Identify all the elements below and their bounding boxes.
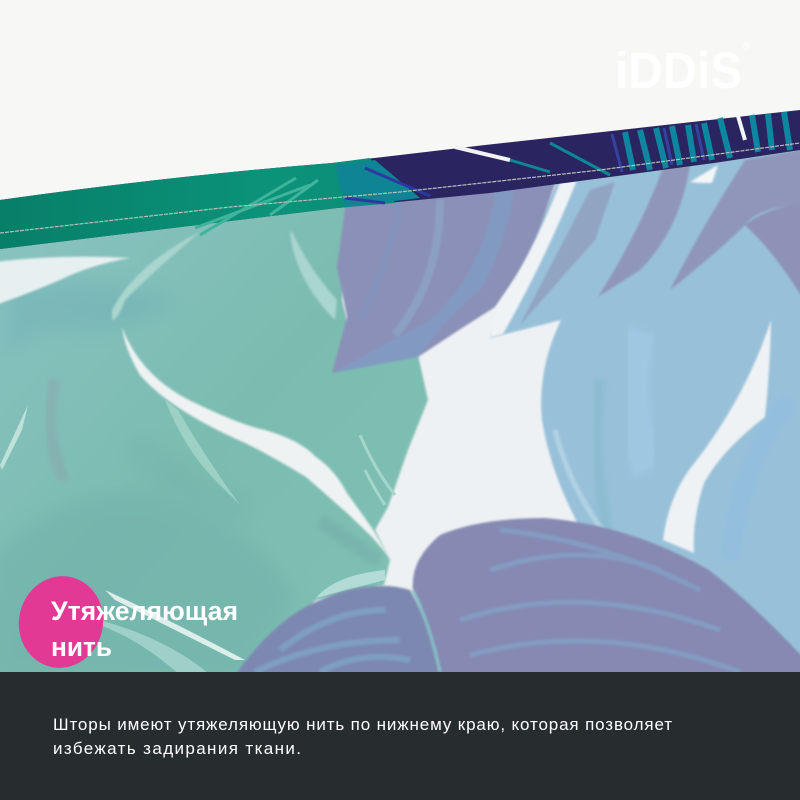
pink blob behind heading [10, 568, 112, 676]
description text: Шторы имеют утяжеляющую нить по нижнему краю, которая позволяет [53, 715, 672, 734]
white streaks on green leaf [0, 232, 395, 675]
hem: striped right section [612, 112, 790, 172]
white streak on blue leaf [663, 320, 771, 553]
description text [53, 715, 672, 758]
white streak beside purple leaf [490, 180, 577, 338]
description text: избежать задирания ткани. [53, 739, 301, 758]
hem: full band [0, 110, 800, 249]
hem: green section [0, 158, 395, 249]
hem: stitching line [0, 143, 800, 233]
panel: blue leaf [490, 130, 800, 690]
heading [51, 596, 238, 662]
heading: Утяжеляющая [51, 596, 238, 626]
fabric base [0, 140, 800, 672]
logo: registered mark: ® [743, 42, 751, 53]
bottom dark band [0, 672, 800, 800]
curtain fabric [0, 130, 800, 690]
hem: blue accent strokes [335, 143, 610, 207]
hem: light feather strokes [195, 178, 318, 235]
panel: bottom purple leaves [225, 518, 800, 690]
heading: нить [51, 632, 112, 662]
logo: IDDIS: iDDiS [615, 42, 742, 99]
panel: upper right leaf streaks [520, 148, 800, 325]
panel: green leaf [0, 198, 428, 690]
hem of the curtain [0, 110, 800, 249]
panel: top purple leaf [332, 175, 558, 373]
